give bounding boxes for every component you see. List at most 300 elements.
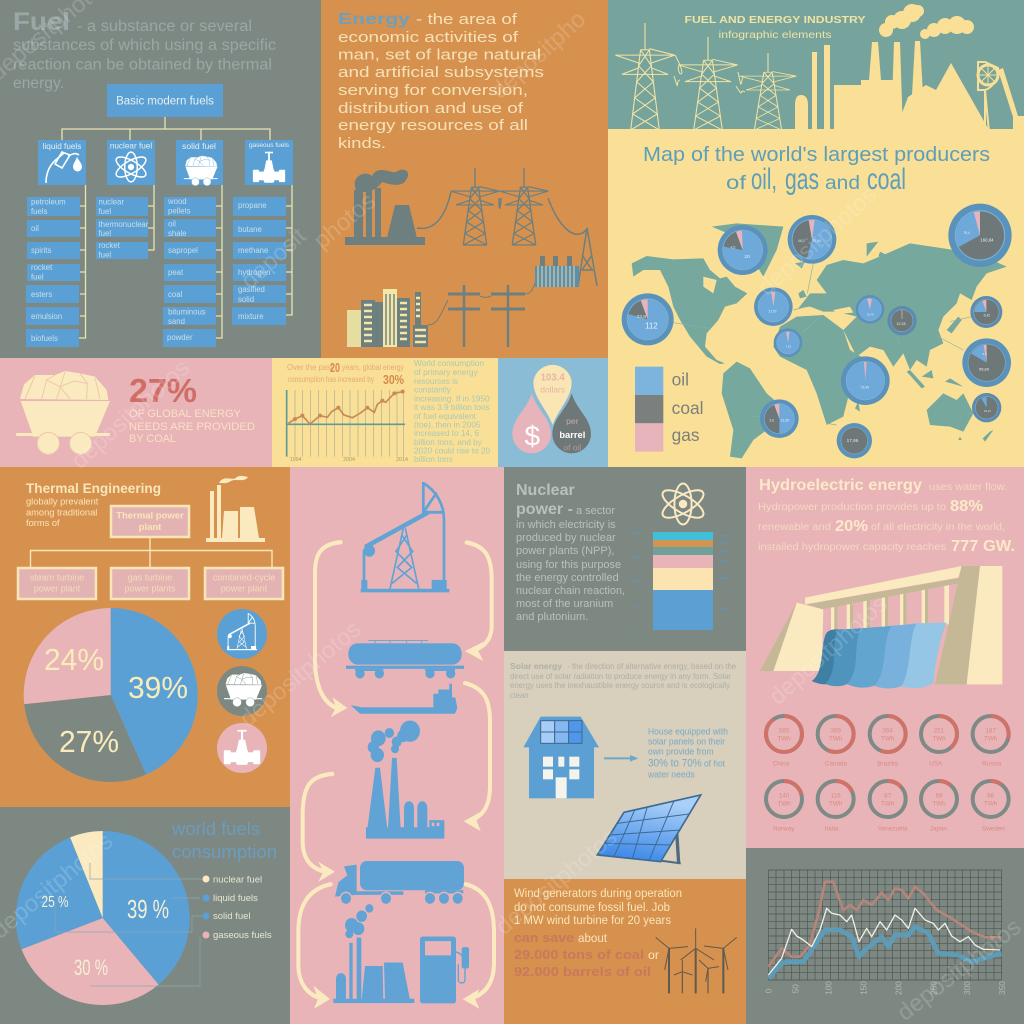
donut: India: India (825, 826, 839, 833)
text: hydro facts: renewable and (758, 522, 831, 533)
icon: oil pumpjack (361, 482, 449, 592)
pie: 58,89: 58,89 (979, 367, 990, 372)
pie: 58,89: 6,4 (983, 352, 987, 356)
donut: Sweden: 66 (987, 792, 995, 799)
list: solid fuels: peat (168, 268, 184, 277)
donut: Japan: TWh (932, 801, 946, 808)
list: solid fuels: sand (168, 317, 185, 326)
list: liquid fuels: rocket (31, 263, 53, 272)
pie: 18,13: 18,13 (984, 409, 991, 413)
stat: 27 percent of global energy: NEEDS ARE PROVIDED (129, 421, 255, 433)
text: wind savings: or (648, 948, 659, 962)
donut: Sweden: TWh (984, 801, 998, 808)
hudson bay (703, 277, 853, 314)
list: gaseous fuels: solid (238, 295, 254, 304)
panel: hydroelectric energy (758, 477, 1015, 833)
chart: world fuels pie: 39 % (127, 894, 169, 924)
box: gas turbine (111, 568, 189, 599)
icon: solar panel (597, 795, 701, 863)
text: nuclear definition (516, 482, 625, 623)
donut: USA: 251 (934, 727, 945, 734)
text: world consumption note: billion tons, and by (414, 438, 483, 447)
text: energy definition (338, 11, 544, 152)
text: nuclear definition: power plants (NPP), (516, 545, 614, 557)
axis labels (764, 981, 1007, 995)
chart: consumption line: 1994 (290, 457, 302, 463)
text: solar definition: Solar energy - the direction of alternative energy, based on the (510, 661, 736, 671)
panel: fuel hierarchy (13, 8, 293, 347)
watermark: depositphotos: depositphotos (235, 616, 366, 733)
panel: energy chain flow (298, 482, 494, 1009)
pie: 57,64: 57,64 (813, 239, 821, 243)
heading: fuel definition: substances of which using a specific (13, 37, 276, 54)
text: thermal heading: globally prevalent (26, 496, 99, 506)
icon: grey barrel drop: barrel (559, 430, 585, 440)
heading: fuel definition: reaction can be obtained by thermal (13, 56, 272, 74)
panel: energy (338, 11, 597, 347)
pie: 160,84: 75,4 (963, 231, 970, 235)
pie: 6,42: 6,42 (984, 313, 990, 317)
axis labels: 50 (790, 984, 800, 993)
box: liquid fuels: liquid fuels (43, 142, 81, 151)
list: solid fuels: powder (167, 333, 193, 342)
text: wind savings: 92.000 barrels of oil (514, 965, 651, 979)
icon: yellow price drop (533, 365, 572, 425)
list: liquid fuels (26, 197, 80, 347)
panel: top banner (608, 4, 1024, 133)
text: solar definition: energy uses the inexhaustible energy source and is ecologically (510, 681, 730, 690)
chart: energy sources pie: 39% (128, 670, 188, 705)
list: solid fuels: shale (168, 229, 187, 238)
stat: 27 percent of global energy (129, 372, 255, 445)
watermark: depositphotos: photos (309, 188, 381, 255)
text: wind savings: Wind generators during operation (514, 886, 682, 900)
text: world consumption note: of fuel equivalent (414, 412, 477, 421)
text: world consumption note: constantly (414, 386, 452, 395)
text: wind savings: 29.000 tons of coal (514, 948, 644, 962)
icon: rail tank car (346, 640, 464, 678)
heading: map title: oil, (751, 163, 777, 196)
donut: China (766, 716, 802, 768)
donut: Norway (766, 781, 802, 833)
donut: Russia (973, 716, 1009, 768)
icon: atom (659, 484, 707, 524)
donut: Venezuela: Venezuela (878, 826, 908, 833)
donut: India: TWh (829, 801, 843, 808)
title: fuel and energy industry: infographic elements (718, 29, 832, 41)
legend: oil coal gas (635, 367, 703, 452)
pie: 57,64: 46,3 (798, 239, 805, 243)
arrow: to text (604, 755, 638, 762)
pie: 7,51: 7,51 (785, 345, 791, 349)
box: gaseous fuels (245, 140, 293, 185)
icon: coal cart (16, 371, 110, 454)
list: solid fuels: oil (168, 220, 176, 228)
chart: world fuels pie: 25 % (42, 894, 68, 911)
text: energy definition: and artificial subsystems (338, 65, 544, 81)
panel: wind energy (514, 886, 737, 993)
donut: Brazilia: TWh (881, 736, 895, 743)
legend: oil coal gas: oil (672, 369, 689, 389)
list: liquid fuels: oil (31, 224, 39, 233)
text: solar house caption: House equipped with (648, 726, 728, 736)
box: basic modern fuels: Basic modern fuels (116, 96, 214, 108)
text: energy definition: kinds. (338, 136, 386, 152)
chart: stacked bar (632, 532, 732, 630)
watermark: depositphotos: depositphotos (66, 354, 195, 474)
text: energy definition: Energy (338, 11, 410, 28)
list: nuclear fuels: fuel (98, 229, 111, 238)
text: thermal heading: Thermal Engineering (26, 481, 161, 496)
box: gas turbine: gas turbine (128, 572, 172, 582)
chart: energy sources pie: 27% (59, 724, 119, 759)
panel: solar energy (510, 661, 736, 863)
axis labels: 250 (929, 981, 939, 995)
legend: fuels: nuclear fuel (213, 874, 262, 886)
list: gaseous fuels: mixture (238, 312, 264, 321)
axis labels: 100 (824, 981, 834, 995)
icon: oil tanker (351, 684, 457, 714)
legend: fuels: gaseous fuels (213, 930, 272, 941)
icon: grey barrel drop (552, 393, 591, 453)
icon: pylons and wires (417, 168, 597, 286)
list: liquid fuels: spirits (31, 246, 51, 255)
donut: India: 116 (831, 792, 841, 799)
text: world consumption note: billion tons (414, 455, 453, 464)
text: nuclear definition: the energy controlled (516, 572, 619, 584)
donut: Brazilia (870, 716, 906, 768)
pie: 21,65: 21,65 (781, 418, 789, 422)
list: nuclear fuels (96, 197, 149, 260)
list: solid fuels (163, 197, 216, 347)
icon: grey barrel drop: per (566, 416, 579, 426)
pie: 7,51 (774, 328, 802, 357)
heading: map title: of (726, 173, 747, 194)
panel: nuclear power (516, 482, 732, 630)
text: wind savings: 1 MW wind turbine for 20 years (514, 913, 671, 927)
donut: India (818, 781, 854, 833)
box: liquid fuels (38, 140, 86, 185)
list: liquid fuels: fuels (31, 207, 48, 216)
watermark: depositphotos: depositphotos (491, 824, 622, 941)
chart: energy sources pie (44, 638, 188, 759)
heading: map title (643, 144, 990, 196)
heading: map title: Map of the world's largest producers (643, 144, 990, 166)
box: solid fuel (176, 140, 223, 186)
text: growth heading: 20 (330, 360, 340, 375)
text: world consumption note: (toe), then in 2005 (414, 420, 481, 429)
text: nuclear definition: power - a sector (516, 501, 615, 518)
axis labels: 350 (997, 981, 1007, 995)
box: nuclear fuel (107, 140, 155, 185)
icon: power station with smoke (345, 170, 425, 245)
text: nuclear definition: in which electricity is (516, 519, 616, 531)
text: solar house caption: own provide from (648, 746, 714, 756)
list: liquid fuels: petroleum (31, 198, 66, 206)
watermark: depositphotos: depositphotos (764, 590, 893, 710)
text: world consumption note (414, 359, 490, 464)
text: nuclear definition: Nuclear (516, 482, 575, 499)
donut: Japan: 69 (935, 792, 943, 799)
arrowheads (313, 642, 483, 1009)
donut: Norway: Norway (773, 826, 795, 833)
box: solid fuel: solid fuel (182, 141, 216, 151)
list: liquid fuels: esters (31, 290, 52, 299)
pie: 17,96 (837, 423, 872, 458)
text: world consumption note: resources is (414, 377, 458, 386)
title: fuel and energy industry: FUEL AND ENERGY INDUSTRY (684, 14, 866, 26)
heading: fuel definition: Fuel (13, 8, 70, 36)
legend: oil coal gas: coal (672, 398, 703, 418)
pie: 20 (718, 225, 768, 275)
heading: fuel definition: - a substance or several (77, 18, 252, 35)
donut: USA: USA (929, 761, 943, 768)
text: solar definition: direct use of solar radiation to produce energy in any form. Solar (510, 672, 731, 681)
box: basic modern fuels (107, 84, 223, 117)
axis labels: 0 (764, 988, 774, 993)
heading: fuel definition (13, 8, 276, 92)
pie: 12,28 (887, 306, 917, 335)
donut: Brazilia: Brazilia (877, 761, 899, 768)
icon: plant and fuel pump (333, 904, 469, 1003)
text: wind savings: about (578, 931, 608, 945)
text: nuclear definition: most of the uranium (516, 598, 613, 610)
heading: map title: coal (867, 163, 906, 196)
donut: Norway: TWh (777, 801, 791, 808)
heading: world fuels consumption: consumption (172, 842, 277, 862)
text: nuclear definition: nuclear chain reaction, (516, 585, 625, 597)
donut: Japan (921, 781, 957, 833)
donut: USA (921, 716, 957, 768)
text: solar definition (510, 661, 736, 700)
title: fuel and energy industry (684, 14, 866, 41)
icon: dam (760, 566, 1002, 688)
heading: map title: and (825, 173, 860, 194)
chart: world fuels pie (41, 857, 169, 980)
connector lines (30, 537, 272, 567)
icon: industrial skyline (608, 4, 1024, 133)
list: liquid fuels: biofuels (31, 334, 58, 343)
box: steam turbine: power plant (34, 584, 81, 594)
list: nuclear fuels: nuclear (98, 198, 124, 206)
list: gaseous fuels: methane (238, 246, 268, 255)
text: world consumption note: World consumption (414, 359, 484, 368)
icon: smoking factory (366, 720, 444, 839)
donut: Norway: 140 (779, 792, 790, 799)
pie: 17,57 (754, 287, 793, 326)
panel: consumption growth (287, 359, 490, 464)
icon: transmission towers (615, 23, 796, 130)
watermark: depositphotos: deposit (236, 222, 312, 294)
text: growth heading: consumption has increased by (288, 375, 374, 384)
box: gas turbine: power plants (124, 584, 176, 594)
donut: China: China (773, 761, 790, 768)
box: gaseous fuels: gaseous fuels (249, 142, 290, 149)
stat: 27 percent of global energy: 27% (129, 372, 197, 409)
heading: map title: gas (785, 163, 819, 196)
panel: coal share (16, 371, 255, 454)
text: hydro facts: installed hydropower capacity reaches (758, 542, 946, 553)
pie: 112: 33,8 (636, 314, 646, 320)
icon: tanker truck (335, 861, 464, 904)
panel: world map (622, 144, 1012, 458)
icon: power plant (206, 476, 265, 542)
panel: oil price drops (512, 365, 591, 453)
box: thermal power plant: Thermal power (116, 510, 184, 522)
connector lines (673, 263, 973, 425)
text: hydro facts: Hydroelectric energy (759, 477, 922, 494)
text: world consumption note: 2020 could rise to 20 (414, 446, 490, 455)
text: growth heading: years, global energy (342, 363, 404, 372)
chart: energy sources pie: 24% (44, 642, 104, 677)
box: thermal power plant (111, 506, 189, 537)
box: steam turbine (18, 568, 96, 599)
text: world consumption note: increasing. If in 1950 (414, 394, 490, 403)
list: nuclear fuels: fuel (98, 250, 111, 260)
text: solar definition: clean (510, 691, 529, 700)
heading: world fuels consumption: world fuels (171, 819, 260, 839)
text: energy definition: - the area of (416, 12, 518, 28)
panel: line chart (764, 870, 1007, 995)
text: solar house caption (647, 726, 728, 779)
box: combined cycle: combined-cycle (213, 572, 275, 582)
chart: consumption line (287, 390, 408, 463)
text: world consumption note: it was 3.9 billion tons (414, 403, 490, 412)
pie: 17,96: 17,96 (847, 438, 859, 443)
text: hydro facts: 777 GW. (951, 538, 1015, 555)
pie: 12,28: 12,28 (896, 322, 905, 326)
text: thermal heading (26, 481, 161, 528)
stat: 27 percent of global energy: OF GLOBAL ENERGY (129, 408, 241, 420)
pie: 16,76 (856, 295, 884, 324)
text: hydro facts: Hydropower production provides up to (758, 502, 946, 513)
pie: 20: 4,5 (731, 246, 735, 250)
pie: 112: 112 (645, 322, 658, 331)
list: gaseous fuels (232, 197, 286, 325)
text: thermal heading: among traditional (26, 508, 97, 518)
list: solid fuels: coal (168, 290, 183, 299)
pie: 18,13 (972, 393, 1001, 422)
pie: 17,57: 17,57 (768, 310, 777, 314)
text: growth heading: Over the past (287, 363, 334, 372)
donut: Venezuela: 87 (884, 792, 892, 799)
text: energy definition: distribution and use of (338, 101, 524, 117)
list: gaseous fuels: hydrogen (238, 268, 271, 277)
text: world consumption note: increased to 14, 6 (414, 429, 480, 438)
box: thermal power plant: plant (139, 522, 162, 533)
watermark: depositphotos: depositphotos (753, 181, 882, 301)
pie: 160,84: 160,84 (980, 238, 994, 243)
text: hydro facts: of all electricity in the world, (871, 522, 1005, 533)
axis labels: 300 (962, 981, 972, 995)
panel: thermal engineering (18, 476, 283, 773)
legend: fuels: liquid fuels (213, 893, 258, 904)
icon: utility poles (428, 283, 535, 347)
pie: 58,89 (962, 338, 1011, 387)
pie: 21,65: 3,6 (769, 418, 774, 422)
icon: yellow price drop: 103.4 (541, 372, 565, 383)
text: nuclear definition: using for this purpose (516, 559, 621, 571)
list: solid fuels: wood (167, 197, 187, 206)
chart: consumption line: 2014 (396, 457, 408, 463)
donut: Canada: Canada (825, 761, 848, 768)
donut: Russia: Russia (982, 761, 1002, 768)
box: steam turbine: steam turbine (30, 572, 84, 582)
text: nuclear definition: produced by nuclear (516, 532, 616, 544)
legend: fuels: solid fuel (213, 911, 250, 922)
text: solar house caption: solar panels on their (648, 736, 725, 746)
donut: Venezuela: TWh (881, 801, 895, 808)
legend: fuels (202, 874, 272, 941)
icon: grey barrel drop: of oil (564, 442, 581, 452)
pie: 112 (622, 293, 674, 345)
donut: Canada: TWh (829, 736, 843, 743)
text: energy definition: economic activities of (338, 30, 519, 46)
connector lines (62, 117, 292, 338)
text: growth heading (287, 360, 404, 387)
text: energy definition: serving for conversion, (338, 83, 528, 99)
donut: Sweden: Sweden (982, 826, 1005, 833)
donut: China: 585 (779, 727, 790, 734)
icon: transformer (535, 256, 579, 287)
donut: USA: TWh (932, 736, 946, 743)
chart: three series (768, 882, 1002, 978)
list: gaseous fuels: butane (238, 225, 262, 234)
pie: 57,64 (788, 215, 836, 264)
text: growth heading: 30% (383, 372, 404, 387)
icon: city buildings (347, 289, 428, 347)
list: nuclear fuels: fuel (98, 207, 111, 216)
pie: 20: 20 (744, 254, 750, 260)
icon: wind turbines (656, 928, 737, 993)
watermark: depositphotos: depositpho (486, 6, 591, 104)
donut: Venezuela (870, 781, 908, 833)
text: hydro facts: 88% (950, 498, 983, 515)
legend: oil coal gas: gas (672, 425, 700, 445)
pie: 73,49 (841, 356, 890, 405)
box: nuclear fuel: nuclear fuel (110, 142, 152, 150)
text: world consumption note: of primary energy (414, 368, 479, 377)
list: solid fuels: pellets (168, 206, 191, 216)
icon: solar house (523, 717, 599, 798)
box: combined cycle: power plant (221, 584, 268, 594)
box: combined cycle (205, 568, 283, 599)
pie: 16,76: 16,76 (867, 312, 874, 316)
chart: consumption line: 2004 (343, 457, 355, 463)
pie: 73,49: 73,49 (861, 385, 869, 389)
icon: pink dollar drop: $ (525, 421, 541, 452)
text: solar house caption: water needs (647, 769, 695, 779)
donut: Brazilia: 364 (882, 727, 893, 734)
list: solid fuels: bituminous (168, 308, 206, 316)
icon: yellow price drop: dollars (540, 384, 565, 394)
chart: world fuels pie: 30 % (74, 955, 108, 980)
text: nuclear definition: and plutonium. (516, 611, 588, 623)
arrows: flow (298, 542, 494, 998)
list: nuclear fuels: rocket (98, 241, 121, 250)
chart: world map landmasses (632, 223, 1007, 458)
list: solid fuels: sapropel (168, 246, 198, 255)
pie: 21,65 (760, 399, 799, 438)
pie: 160,84 (948, 204, 1012, 267)
text: hydro facts (758, 477, 1015, 555)
donut: Canada: 369 (830, 727, 841, 734)
text: energy definition: man, set of large natural (338, 48, 541, 64)
donut: Russia: TWh (984, 736, 998, 743)
connector lines (55, 863, 202, 986)
list: gaseous fuels: propane (238, 201, 267, 210)
list: nuclear fuels: thermonuclear (98, 220, 149, 229)
